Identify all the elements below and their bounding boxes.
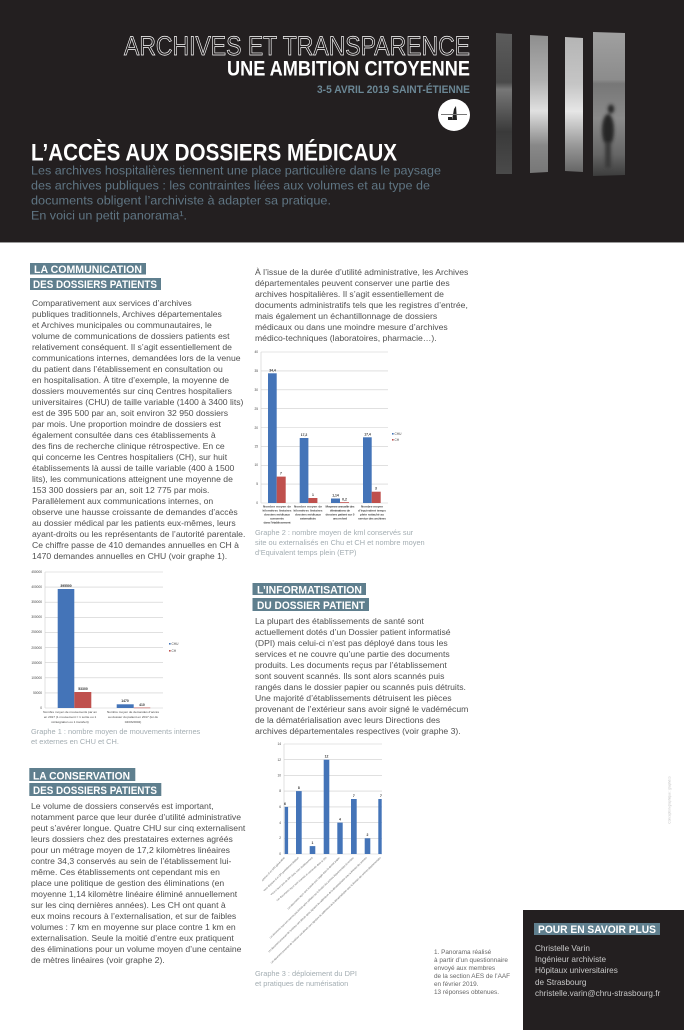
chart: graphe 2: 1,14: [332, 494, 339, 498]
chart: graphe 1: 50000: [33, 691, 42, 695]
chart: graphe 1: 0: [40, 706, 42, 710]
chart: graphe 2: 1: [312, 493, 314, 497]
chart: graphe 1: 400000: [31, 585, 42, 589]
text block: communication: en hospitalisation. À titre d’exemple, la moyenne de: [32, 375, 229, 385]
text block: informatisation: [255, 616, 468, 736]
introduction text: [31, 164, 441, 222]
text block: conservation: [31, 801, 246, 965]
chart: graphe 1: 150000: [31, 661, 42, 665]
text block: archives départementales: [255, 267, 468, 343]
caption: graphe 2: Graphe 2 : nombre moyen de kml conservés sur: [255, 528, 413, 537]
chart: graphe 2: Nombre moyen: [361, 504, 383, 508]
text block: communication: Comparativement aux services d’archives: [32, 298, 192, 308]
title: Archives et transparence: ARCHIVES ET TRANSPARENCE: [124, 31, 470, 61]
chart: graphe 2: 0,2: [342, 498, 347, 502]
header band: [0, 0, 684, 243]
text block: informatisation: (DPI) mais celui-ci n’est pas déployé dans tous les: [255, 638, 448, 648]
main heading: L’ACCÈS AUX DOSSIERS MÉDICAUX: [31, 138, 397, 166]
text block: conservation: Le volume de dossiers conservés est important,: [31, 801, 214, 811]
text block: communication: relativement conséquent. Il s’agit essentiellement de: [32, 342, 232, 352]
text block: informatisation: actuellement dotés d’un Dossier patient informatisé: [255, 627, 451, 637]
text block: conservation: peut s’avérer longue. Quatre CHU sur cinq externalisent: [31, 823, 245, 833]
chart: graphe 3: [262, 742, 382, 964]
chart: graphe 2: plein rattaché au: [360, 512, 384, 516]
chart: graphe 3: 10: [277, 774, 281, 778]
text block: communication: Ce chiffre passe de 410 demandes annuelles en CH à: [32, 540, 239, 550]
caption: graphe 2: site ou externalisés en Chu et CH et nombre moyen: [255, 538, 425, 547]
caption: graphe 1: Graphe 1 : nombre moyen de mouvements internes: [31, 727, 200, 736]
chart: graphe 1: 410: [139, 703, 145, 707]
text block: communication: du patient dans l’établissement en consultation ou: [32, 364, 223, 374]
text block: communication: dossiers mouvementés sur cinq Centres hospitaliers: [32, 386, 232, 396]
text block: communication: volume de communications de dossiers patients est: [32, 331, 230, 341]
text block: communication: établissements là aussi de taille variable (400 à 1500: [32, 463, 234, 473]
chart: graphe 3: 14: [277, 742, 281, 746]
text block: communication: communications internes, demandées lors de la venue: [32, 353, 241, 363]
chart: graphe 2: 3: [375, 486, 377, 490]
chart: graphe 1: CHU: [172, 642, 179, 646]
text block: communication: et Archives municipales ou communautaires, le: [32, 320, 212, 330]
text block: conservation: leurs dossiers chez des prestataires externes agréés: [31, 834, 233, 844]
chart: graphe 1: au dossier du patient en 2017 (loi du: [108, 715, 158, 719]
introduction text: En voici un petit panorama¹.: [31, 208, 187, 222]
chart: graphe 2: dans l’établissement: [264, 520, 290, 524]
contact details: Hôpitaux universitaires: [535, 966, 618, 975]
chart: graphe 2: kilomètres linéaires: [262, 508, 292, 512]
chart: graphe 1: 100000: [31, 676, 42, 680]
text block: archives départementales: médico-techniques (laboratoires, pharmacie…).: [255, 333, 437, 343]
chart: graphe 1: CH: [172, 649, 177, 653]
chart: graphe 2: d’équivalent temps: [358, 508, 386, 512]
chart: graphe 3: Les documents reçus sont scannés puis rangés dans le dossier papier: [286, 856, 341, 910]
text block: conservation: externalisation. Seule la moitié d’entre eux pratiquent: [31, 933, 234, 943]
text block: communication: observe une hausse croissante de demandes d’accès: [32, 507, 238, 517]
text block: communication: au dossier médical par les patients eux-mêmes, leurs: [32, 518, 236, 528]
text block: communication: des fins de recherche clinique rétrospective. En ce: [32, 441, 225, 451]
text block: conservation: contre 34,3 conservés au sein de l’établissement lui-: [31, 856, 231, 866]
chart: graphe 1: 300000: [31, 615, 42, 619]
text block: informatisation: sont souvent scannés. Ils sont alors scannés puis: [255, 671, 444, 681]
text block: archives départementales: mais également un échantillonnage de dossiers: [255, 311, 437, 321]
chart: graphe 3: Vous disposez d’un DPI partiellement déployé: [262, 855, 300, 892]
chart: graphe 1: Nombre moyen de demandes d’accès: [107, 710, 160, 714]
text block: communication: ayant-droits ou les représentants de l’autorité parentale.: [32, 529, 245, 539]
text block: communication: par mois. Une proportion moindre de dossiers est: [32, 419, 221, 429]
caption: graphe 3: Graphe 3 : déploiement du DPI: [255, 969, 357, 978]
heading: la conservation des dossiers patients: LA CONSERVATION: [33, 770, 130, 782]
chart: graphe 2: kilomètres linéaires: [294, 508, 323, 512]
heading: la communication des dossiers patients: LA COMMUNICATION: [34, 264, 142, 276]
text block: conservation: eux moins recours à l’externalisation, et sur de faibles: [31, 911, 236, 921]
chart: graphe 1: 395500: [60, 584, 72, 588]
chart: graphe 1: 53300: [78, 687, 88, 691]
text block: conservation: sur les cinq dernières années). Les CH ont quant à: [31, 900, 226, 910]
chart: graphe 2: 17,2: [301, 433, 307, 437]
chart: graphe 2: 40: [254, 350, 258, 354]
text block: communication: Parallèlement aux communications internes, on: [32, 496, 213, 506]
chart: graphe 1: 450000: [31, 570, 42, 574]
chart: graphe 2: 35: [254, 369, 258, 373]
contact details: [535, 944, 660, 998]
chart: graphe 3: 2: [367, 833, 369, 837]
chart: graphe 2: 34,4: [269, 368, 276, 372]
text block: archives départementales: documents administratifs tels que les registres d’entrée,: [255, 300, 468, 310]
chart: graphe 2: Nombre moyen de: [294, 504, 322, 508]
text block: communication: lits), les communications atteignent une moyenne de: [32, 474, 233, 484]
chart: graphe 3: 7: [353, 794, 355, 798]
contact details: Christelle Varin: [535, 944, 590, 953]
chart: graphe 1: en 2017 (1 mouvement = 1 sortie ou 1: [44, 715, 96, 719]
chart: graphe 3: 1: [312, 841, 314, 845]
photo strips with blurred silhouette: [496, 32, 625, 176]
caption: graphe 3: et pratiques de numérisation: [255, 979, 348, 988]
chart: graphe 3: 4: [279, 821, 281, 825]
caption: graphe 3: [255, 969, 357, 988]
chart: graphe 2: dossiers médicaux: [264, 512, 290, 516]
text block: conservation: même. Ces établissements ont cependant mis en: [31, 867, 220, 877]
chart: graphe 3: Les documents reçus sont scannés puis détruits après validation par la direction des archives départementales du territoire: [268, 856, 355, 939]
text block: informatisation: services et ne couvre qu’une partie des documents: [255, 649, 450, 659]
text block: conservation: notamment parce que leur durée d’utilité administrative: [31, 812, 241, 822]
text block: conservation: pour un métrage moyen de 17,2 kilomètres linéaires: [31, 845, 230, 855]
footnote: à partir d’un questionnaire: [434, 957, 508, 964]
caption: graphe 2: [255, 528, 425, 557]
chart: graphe 1: 250000: [31, 630, 42, 634]
text block: informatisation: provenant de l’extérieur sans avoir signé le vadémécum: [255, 704, 468, 714]
text block: informatisation: La plupart des établissements de santé sont: [255, 616, 424, 626]
text block: archives départementales: médicaux ou dans une moindre mesure d’archives: [255, 322, 448, 332]
chart: graphe 2: service des archives: [358, 516, 386, 520]
heading: la communication des dossiers patients: [30, 263, 161, 291]
chart: graphe 3: 6: [284, 802, 286, 806]
text block: conservation: de mètres linéaires (voir graphe 2).: [31, 955, 165, 965]
chart: graphe 3: 4: [339, 818, 341, 822]
vertical credit: Conception graphique : graphéco: [668, 776, 672, 824]
text block: informatisation: Une majorité d’établissements détruisent les pièces: [255, 693, 452, 703]
text block: archives départementales: À l’issue de la durée d’utilité administrative, les Archives: [255, 267, 468, 277]
chart: graphe 2: Moyenne annuelle des: [326, 504, 355, 508]
text block: archives départementales: départementales peuvent conserver une partie des: [255, 278, 450, 288]
text block: communication: également consultée dans ces établissements à: [32, 430, 216, 440]
chart: graphe 2: 25: [254, 407, 258, 411]
caption: graphe 1: [31, 727, 200, 746]
chart: graphe 1: Nombre moyen de mouvements par an: [43, 710, 97, 714]
text block: communication: universitaires (CHU) de taille variable (1400 à 3400 lits): [32, 397, 243, 407]
chart: graphe 2: 15: [254, 444, 258, 448]
chart: graphe 3: 0: [279, 852, 281, 856]
chart: graphe 3: Vous n’avez pas de DPI dans votre établissement: [269, 856, 314, 896]
text block: informatisation: rangés dans le dossier papier ou scannés puis détruits.: [255, 682, 466, 692]
chart: graphe 3: 12: [325, 754, 328, 758]
heading: la conservation des dossiers patients: [29, 768, 162, 797]
text block: informatisation: produits. Les documents reçus par l’établissement: [255, 660, 447, 670]
chart: graphe 3: 12: [277, 758, 281, 762]
chart: graphe 1: réintégration ou 1 transfert): [51, 720, 89, 724]
chart: graphe 3: 8: [298, 786, 300, 790]
text block: communication: 153 300 dossiers par an, soit 12 775 par mois.: [32, 485, 209, 495]
caption: graphe 2: d’Equivalent temps plein (ETP): [255, 548, 356, 557]
contact details: christelle.varin@chru-strasbourg.fr: [535, 989, 660, 998]
chart: graphe 2: dossiers patient sur 5: [326, 512, 355, 516]
chart: graphe 2: 20: [254, 426, 258, 430]
text block: conservation: des éliminations pour un volume moyen d’une centaine: [31, 944, 241, 954]
text block: communication: [32, 298, 245, 561]
contact details: de Strasbourg: [535, 978, 586, 987]
text block: informatisation: archives départementales respectives (voir graphe 3).: [255, 726, 461, 736]
chart: graphe 2: [254, 350, 402, 524]
chart: graphe 3: 8: [279, 789, 281, 793]
heading: l'informatisation du dossier patient: [252, 583, 369, 611]
text block: conservation: moyenne 1,14 kilomètre linéaire éliminé annuellement: [31, 889, 237, 899]
chart: graphe 2: éliminations de: [330, 508, 350, 512]
text block: archives départementales: archives hospitalières. Il s’agit essentiellement de: [255, 289, 444, 299]
footnote: 1. Panorama réalisé: [434, 949, 491, 956]
chart: graphe 3: Les documents provenant de l’extérieur sont détruits après signature du vadémécum de la dématérialisation avec la direction des archives: [267, 855, 368, 953]
panel: pour en savoir plus: [523, 910, 684, 1030]
chart: graphe 2: dossiers médicaux: [295, 512, 321, 516]
logo badge: [438, 99, 470, 131]
introduction text: Les archives hospitalières tiennent une place particulière dans le paysage: [31, 164, 441, 178]
chart: graphe 2: CH: [394, 438, 400, 442]
chart: graphe 2: 7: [280, 472, 282, 476]
text block: communication: qui concerne les Centres hospitaliers (CH), sur huit: [32, 452, 227, 462]
chart: graphe 2: externalisés: [300, 516, 316, 520]
chart: graphe 3: 7: [380, 794, 382, 798]
chart: graphe 1: [31, 570, 179, 724]
contact details: Ingénieur archiviste: [535, 955, 606, 964]
chart: graphe 2: 10: [254, 463, 258, 467]
chart: graphe 1: 350000: [31, 600, 42, 604]
chart: graphe 3: 2: [279, 836, 281, 840]
date and place: 3-5 AVRIL 2019 SAINT-ÉTIENNE: [317, 83, 470, 96]
chart: graphe 2: 5: [256, 482, 258, 486]
footnote: [434, 949, 510, 996]
chart: graphe 3: Les documents reçus sont scannés et conservés dans le DPI: [275, 856, 328, 902]
chart: graphe 2: CHU: [394, 432, 402, 436]
chart: graphe 2: 0: [256, 501, 258, 505]
heading: l'informatisation du dossier patient: L’INFORMATISATION: [257, 584, 362, 596]
text block: conservation: place une politique de gestion des éliminations (en: [31, 878, 224, 888]
text block: conservation: volumes : 7 km en moyenne sur place contre 1 km en: [31, 922, 236, 932]
footnote: envoyé aux membres: [434, 965, 495, 972]
introduction text: documents obligent l’archiviste à adapter sa pratique.: [31, 194, 331, 208]
chart: graphe 2: Nombre moyen de: [263, 504, 291, 508]
footnote: de la section AES de l’AAF: [434, 973, 510, 980]
footnote: 13 réponses obtenues.: [434, 989, 499, 996]
text block: communication: publiques traditionnels, Archives départementales: [32, 309, 222, 319]
chart: graphe 1: 1470: [121, 699, 129, 703]
chart: graphe 3: 6: [279, 805, 281, 809]
chart: graphe 1: 200000: [31, 646, 42, 650]
footnote: en février 2019.: [434, 981, 478, 988]
text block: communication: est de 395 500 par an, soit environ 32 950 dossiers: [32, 408, 228, 418]
introduction text: des archives publiques : les contraintes liées aux volumes et au type de: [31, 178, 430, 192]
chart: graphe 1: 04/03/2002): [125, 720, 141, 724]
subtitle: une ambition citoyenne: UNE AMBITION CITOYENNE: [227, 58, 470, 80]
text block: communication: 1470 demandes annuelles en CHU (voir graphe 1).: [32, 551, 227, 561]
chart: graphe 2: 30: [254, 388, 258, 392]
caption: graphe 1: et externes en CHU et CH.: [31, 737, 119, 746]
chart: graphe 2: conservés: [270, 516, 284, 520]
text block: informatisation: de la dématérialisation avec leurs Directions des: [255, 715, 440, 725]
chart: graphe 2: ans en kml: [333, 516, 347, 520]
chart: graphe 2: 17,4: [364, 432, 371, 436]
